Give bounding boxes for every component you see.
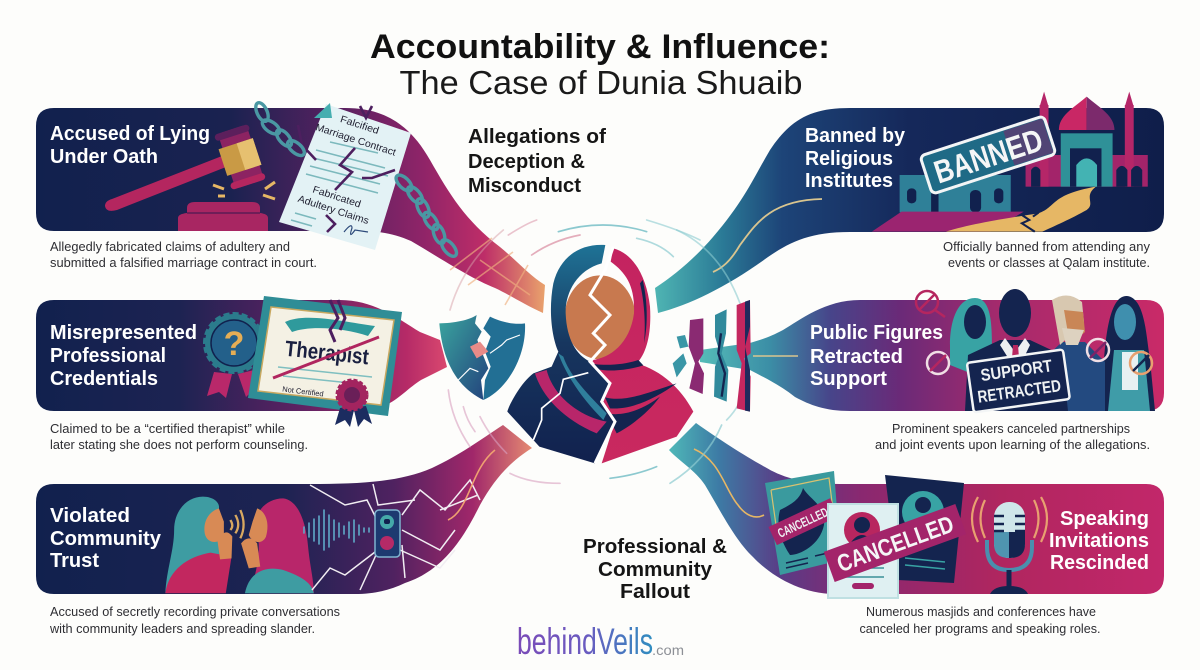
text: lying under oath description: Allegedly fabricated claims of adultery and (50, 240, 290, 254)
heading: professional and community fallout: Community (598, 559, 713, 581)
text: credentials description: Claimed to be a “certified therapist” while (50, 422, 285, 436)
text: speaking invitations description: canceled her programs and speaking roles. (860, 622, 1100, 636)
panel: speaking invitations rescinded (669, 423, 1164, 598)
panel heading: Speaking (1060, 508, 1149, 530)
panel heading: Trust (50, 550, 99, 572)
title (370, 28, 830, 101)
text: lying under oath description: submitted a falsified marriage contract in court. (50, 256, 317, 270)
panel heading: Support (810, 368, 887, 390)
text: community trust description: Accused of secretly recording private conversations (50, 605, 340, 619)
panel heading: Rescinded (1050, 552, 1149, 574)
panel heading (50, 505, 162, 572)
text: speaking invitations description: Numerous masjids and conferences have (866, 605, 1096, 619)
icon: gavel (105, 124, 275, 231)
text: public figures description: Prominent speakers canceled partnerships (892, 422, 1130, 436)
text: credentials description (50, 422, 308, 452)
panel heading (1049, 508, 1149, 574)
icon: question badge: ? (224, 325, 244, 363)
icon: support retracted sign: RETRACTED (976, 376, 1062, 407)
text: banned description: Officially banned from attending any (943, 240, 1151, 254)
title: The Case of Dunia Shuaib (400, 64, 802, 101)
central figure with rings, shield and pillars (439, 220, 751, 483)
icon: group of public figures (950, 289, 1155, 411)
icon: banned stamp: BANNED (929, 122, 1047, 190)
icon: therapist certificate: Therapist (284, 336, 371, 369)
icon: cancelled posters: CANCELLED (775, 504, 830, 541)
heading: professional and community fallout: Fallout (620, 581, 690, 603)
text: public figures description (875, 422, 1150, 452)
gold crack line (448, 450, 495, 520)
text: community trust description: with community leaders and spreading slander. (49, 622, 315, 636)
panel: misrepresented professional credentials (36, 296, 447, 427)
heading: allegations of deception and misconduct: Deception & (468, 151, 585, 173)
panel heading: Community (50, 528, 162, 550)
heading: allegations of deception and misconduct: Allegations of (468, 126, 606, 148)
text: speaking invitations description (860, 605, 1100, 636)
icon: prohibition signs (916, 291, 1152, 374)
panel heading (50, 123, 210, 168)
panel heading (810, 322, 943, 390)
text: banned description (943, 240, 1151, 270)
panel heading (50, 322, 197, 390)
icon: cancelled posters (765, 471, 964, 598)
icon: mosque and cracked road (872, 92, 1148, 232)
icon: torn document: Marriage Contract (314, 122, 397, 159)
logo: behindVeils (517, 621, 653, 662)
icon: torn document: Adultery Claims (296, 194, 370, 227)
heading: professional and community fallout (583, 536, 727, 603)
panel heading: Misrepresented (50, 322, 197, 344)
impact rings (448, 220, 748, 483)
icon: sound wave (304, 510, 369, 550)
panel heading: Under Oath (50, 146, 158, 168)
icon: broken chain (253, 101, 459, 259)
icon: cancelled banner: CANCELLED (834, 511, 957, 578)
icon: support retracted sign: SUPPORT (979, 356, 1054, 385)
icon: broken shield (439, 315, 525, 400)
panel: public figures retracted support (700, 289, 1164, 412)
icon: torn document: Falcified (339, 114, 380, 137)
panel heading: Retracted (810, 346, 903, 368)
icon: torn document: Fabricated (311, 184, 362, 210)
title: Accountability & Influence: (370, 28, 830, 66)
panel heading: Credentials (50, 368, 158, 390)
panel heading: Institutes (805, 170, 893, 192)
text: credentials description: later stating she does not perform counseling. (50, 438, 308, 452)
panel heading: Accused of Lying (50, 123, 210, 145)
hijab figure (507, 245, 693, 463)
icon: broken pillars (673, 300, 751, 412)
icon: torn document (279, 103, 411, 250)
icon: microphone (972, 497, 1047, 594)
panel heading: Invitations (1049, 530, 1149, 552)
text: lying under oath description (50, 240, 317, 270)
panel heading: Professional (50, 345, 166, 367)
icon: phone recorder (375, 510, 400, 557)
heading: professional and community fallout: Professional & (583, 536, 727, 558)
panel heading: Religious (805, 148, 893, 170)
panel: violated community trust (36, 425, 532, 594)
icon: support retracted sign (967, 349, 1070, 412)
panel heading (805, 125, 906, 192)
heading: allegations of deception and misconduct: Misconduct (468, 175, 581, 197)
heading: allegations of deception and misconduct (468, 126, 606, 197)
icon: therapist certificate (248, 296, 402, 427)
logo: .com (652, 642, 684, 658)
panel heading: Public Figures (810, 322, 943, 344)
text: banned description: events or classes at Qalam institute. (948, 256, 1150, 270)
text: public figures description: and joint events upon learning of the allegations. (875, 438, 1150, 452)
panel heading: Banned by (805, 125, 906, 147)
icon: therapist certificate: Not Certified (282, 384, 324, 399)
panel: banned by religious institutes (655, 92, 1164, 313)
panel heading: Violated (50, 505, 130, 527)
icon: cracked glass lines (310, 480, 480, 590)
icon: question badge (205, 314, 263, 398)
icon: two women whispering (165, 497, 314, 593)
text: community trust description (49, 605, 340, 636)
panel: accused of lying under oath (36, 101, 545, 313)
